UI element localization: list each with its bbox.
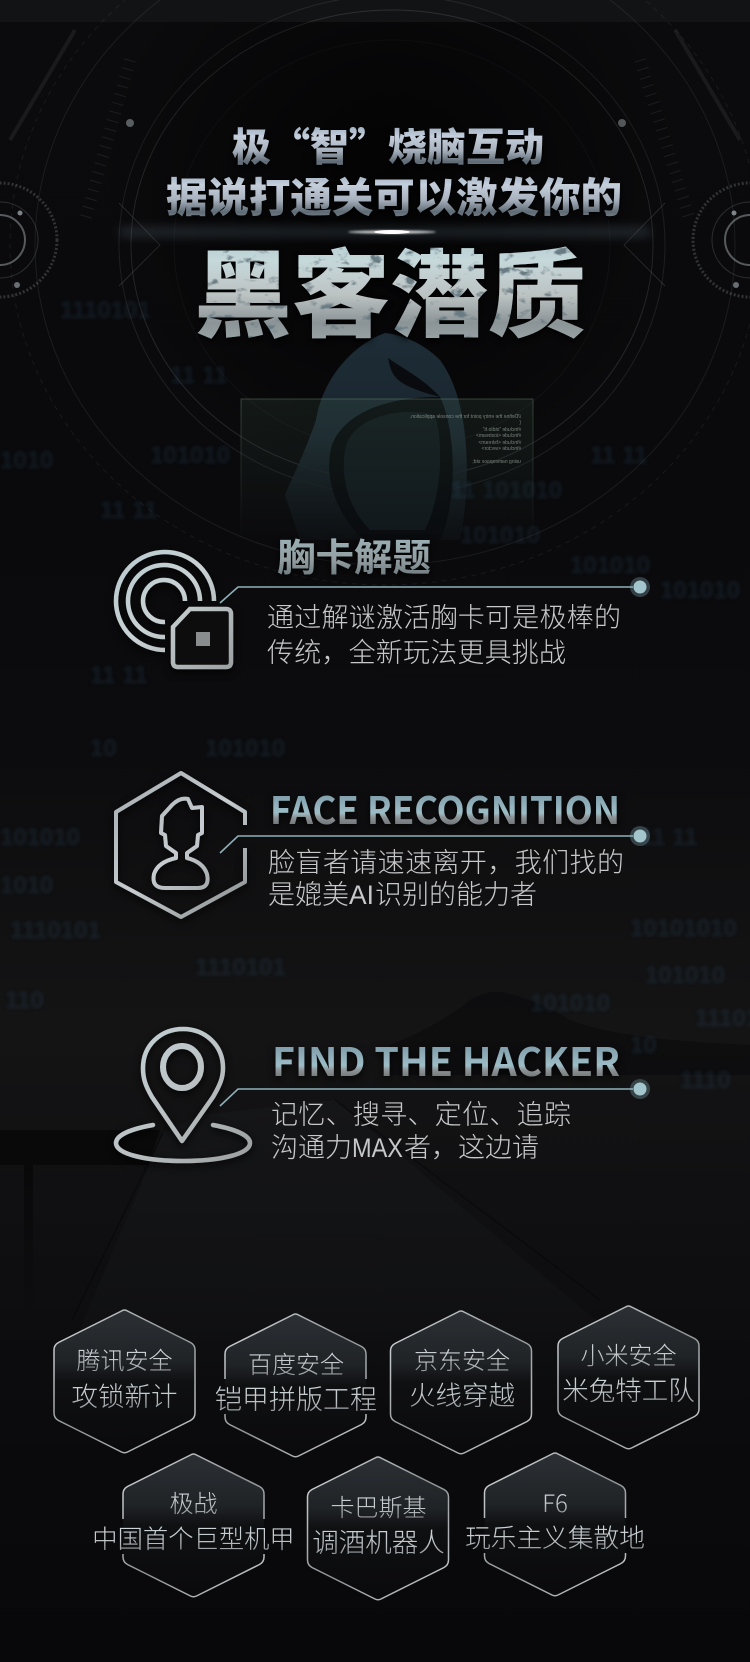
hex: Kaspersky: 调酒机器人 [312,1521,445,1560]
binary code backdrop: 101010 [0,824,80,851]
body text: 通过解谜激活胸卡可是极棒的 [267,603,621,633]
binary code backdrop: 10 [630,1032,657,1059]
code panel: { [519,420,521,426]
hex: Xiaomi Security [558,1306,699,1449]
hex: Geetest: 中国首个巨型机甲 [92,1520,295,1556]
hex: Xiaomi Security: 米兔特工队 [562,1369,695,1408]
binary code backdrop: 10101010 [630,915,737,942]
body text: 传统，全新玩法更具挑战 [267,638,566,668]
hex: Kaspersky: 卡巴斯基 [330,1488,426,1523]
binary code backdrop: 101010 [460,522,540,549]
binary code backdrop: 101010 [660,577,740,604]
binary code backdrop: 101010 [570,552,650,579]
body text: MAX [352,1133,403,1163]
pier and dock [0,1100,690,1400]
hex: Geetest [92,1454,295,1597]
hex: Xiaomi Security: 小米安全 [580,1336,676,1371]
body text [268,848,624,910]
hooded hacker figure [285,333,467,540]
binary code backdrop: 1110101 [10,917,101,944]
center vignette [0,22,750,502]
hex: JD Security: 火线穿越 [409,1374,515,1413]
hex: Baidu Security: 百度安全 [248,1345,344,1380]
heading: FACE RECOGNITION: FACE RECOGNITION [270,780,620,835]
binary code backdrop: 1110 [680,1067,731,1094]
binary code backdrop: 11 11 [90,662,147,689]
connector line with dot [220,1079,650,1106]
hex: F6: 玩乐主义集散地 [465,1518,645,1555]
section: chest badge puzzle [116,527,650,668]
lens flare [120,228,650,236]
code panel: #include "stdio.h" [482,427,521,433]
mountain silhouette [390,992,750,1075]
binary code backdrop: 1010 [0,447,53,474]
section: find the hacker [116,1029,650,1163]
body text: 沟通力 [271,1133,352,1163]
body text: AI [349,880,374,910]
code panel: #include <fstream> [478,440,521,446]
hex: Tencent Security: 攻锁新计 [72,1375,178,1414]
hex: JD Security [390,1311,532,1454]
binary code backdrop: 11 11 [100,497,157,524]
hex: F6 [465,1453,645,1596]
title: hacker potential: 黑客潜质 [194,220,586,357]
hex: Kaspersky [308,1457,448,1600]
section: face recognition [116,773,650,917]
HUD rings backdrop [0,0,750,585]
title: line 1: 极“智”烧脑互动 [232,117,544,173]
binary code backdrop: 11 101010 [450,477,562,504]
body text: 记忆、搜寻、定位、追踪 [271,1100,571,1130]
hex: Baidu Security: 铠甲拼版工程 [215,1378,377,1417]
binary code backdrop: 101010 [645,962,725,989]
binary code backdrop: 101010 [205,735,285,762]
binary code backdrop: 101010 [150,442,230,469]
hex: Baidu Security [215,1314,377,1457]
heading: FIND THE HACKER: FIND THE HACKER [272,1032,620,1088]
binary code backdrop: 1110101 [195,954,286,981]
binary code backdrop: 10 [90,735,117,762]
hex: F6: F6 [542,1484,568,1519]
heading: chest badge puzzle: 胸卡解题 [277,527,431,582]
hex: Geetest: 极战 [170,1484,218,1519]
connector line with dot [220,577,650,603]
code panel: using namespace std; [472,459,521,465]
binary code backdrop: 1010 [0,872,53,899]
title: line 2: 据说打通关可以激发你的 [166,164,622,224]
binary code backdrop: 11 11 [170,362,227,389]
body text: 者，这边请 [404,1133,539,1163]
binary code backdrop: 11 11 [640,824,697,851]
code panel: //Define the entry point for the console application. [410,414,521,420]
binary code backdrop: 101010 [530,990,610,1017]
body text: 脸盲者请速速离开，我们找的 [268,848,624,878]
binary code backdrop: 110 [5,987,44,1014]
code panel: #include <iostream> [476,433,521,439]
code panel [241,399,533,540]
hex: Tencent Security: 腾讯安全 [76,1341,172,1376]
body text: 识别的能力者 [375,880,537,910]
top band [0,0,750,22]
icon: hexagon with person [116,773,245,917]
binary code backdrop: 1110101 [60,297,151,324]
icon: location pin [116,1029,250,1161]
binary code backdrop: 11 11 [590,442,647,469]
hex: Tencent Security [54,1310,195,1453]
binary code backdrop [0,297,750,1094]
body text [271,1100,571,1163]
body text: 是媲美 [268,880,349,910]
code panel: #include <vector> [481,446,521,452]
icon: badge chip with signal arcs [116,552,231,667]
connector line with dot [220,826,650,853]
hex: JD Security: 京东安全 [414,1341,510,1376]
body text [267,603,621,668]
